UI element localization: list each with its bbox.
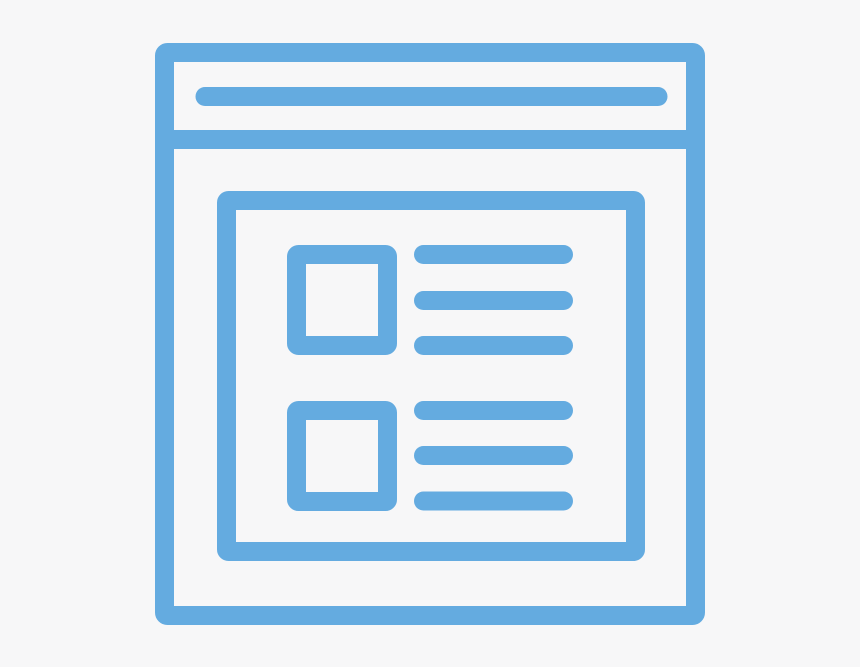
item 1	[296, 254, 564, 346]
browser window frame	[164, 52, 696, 616]
item 2	[296, 410, 564, 502]
content panel	[226, 200, 636, 552]
